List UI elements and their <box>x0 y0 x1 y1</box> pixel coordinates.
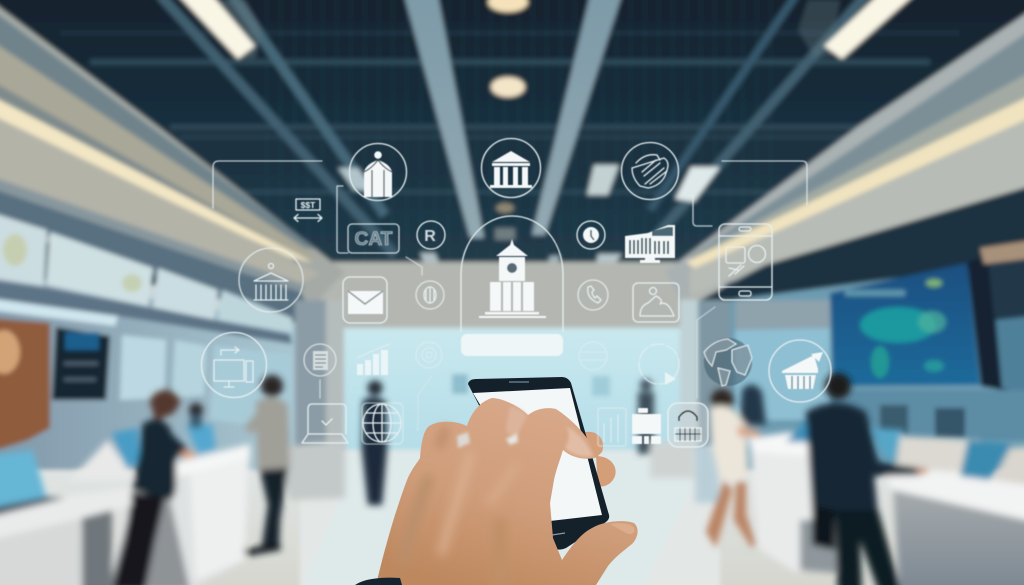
connector: document to laptop <box>319 380 321 398</box>
icon: target <box>416 342 442 368</box>
person: woman in white dress <box>706 389 760 548</box>
person: back right <box>638 379 654 454</box>
light surround panels <box>215 0 262 58</box>
person: man in dark suit <box>806 373 928 585</box>
connector: centre faint <box>416 376 432 430</box>
blue strip <box>0 298 118 326</box>
right upper dark band <box>700 185 1024 320</box>
back wall <box>300 262 720 334</box>
connector: CAT bracket <box>337 186 348 253</box>
person: behind desk right <box>740 384 766 425</box>
wall lamp glow <box>0 330 20 374</box>
desk: back left <box>278 440 345 500</box>
icon: dome circle <box>350 144 406 200</box>
connector: short elbow <box>406 257 422 275</box>
desk: far right <box>880 468 1024 585</box>
desk: bottom left <box>0 488 132 585</box>
icon: $$T exchange <box>294 199 322 222</box>
icon: R circle <box>417 221 445 249</box>
connector: right vertical <box>697 307 715 398</box>
dark wall panel <box>52 327 110 400</box>
icon: telephone circle <box>578 280 608 310</box>
screen frame <box>967 256 1002 390</box>
icon: gauge circle <box>622 142 678 200</box>
laptop screen left desk <box>112 428 140 468</box>
icon: mail <box>343 277 387 323</box>
ceiling slat texture <box>260 0 780 270</box>
icon: rising basket circle <box>769 340 831 402</box>
icon: briefcase <box>632 408 661 444</box>
smartphone <box>468 377 609 550</box>
left soffit <box>0 0 345 320</box>
icon: R circle: R <box>424 228 436 245</box>
person: woman in dark jacket <box>112 390 196 585</box>
desk: centre left <box>105 444 250 585</box>
band below screen <box>830 390 1024 440</box>
laptop right <box>960 440 1012 480</box>
left wall signage panels <box>0 212 292 332</box>
column right <box>680 300 732 470</box>
desk: white ramp left <box>70 440 135 480</box>
connector: top left bracket <box>213 161 322 208</box>
left wall <box>0 270 300 480</box>
far right screens <box>988 250 1024 400</box>
desk: right <box>748 420 860 575</box>
icon: globe tile <box>362 403 403 444</box>
icon: world map globe <box>704 338 752 386</box>
finger tip shading <box>506 406 593 457</box>
icon: laptop <box>302 404 348 443</box>
icon: CAT tag: CAT <box>354 229 393 250</box>
knuckle and tendon shading <box>404 430 516 582</box>
icon: small leaf circle <box>416 281 444 309</box>
column left <box>295 300 343 450</box>
floor <box>0 470 1024 585</box>
icon: classical bank circle <box>239 248 303 312</box>
icon: phone outline <box>719 224 772 300</box>
brown wall panel <box>0 318 50 452</box>
hand holding phone <box>355 398 638 585</box>
icon: bar growth <box>357 344 390 375</box>
laptop bottom left <box>0 450 66 517</box>
person: man in grey shirt <box>243 375 290 556</box>
icon: headset keypad <box>668 403 708 447</box>
icon: bank circle <box>482 138 540 198</box>
ceiling lights <box>178 0 914 274</box>
icon: faint globe <box>639 344 679 385</box>
white device far right <box>994 446 1024 486</box>
dark wall band <box>0 280 292 344</box>
people and desks <box>0 373 1024 585</box>
desk: far right back <box>895 436 980 478</box>
icon: clock <box>577 221 605 249</box>
right wall <box>730 260 1024 470</box>
icon: document circle <box>304 344 336 376</box>
laptop screen centre desk <box>186 424 216 454</box>
hand: far fingers behind phone <box>585 432 616 487</box>
thumb nail edge <box>610 523 635 534</box>
interface overlay icons <box>202 138 831 447</box>
icon: bars tile <box>598 408 626 446</box>
person: centre back <box>362 380 387 505</box>
ceiling grid beams <box>60 0 960 255</box>
icon: monitor chart <box>625 225 675 263</box>
sleeve <box>355 578 402 585</box>
icon: computer circle <box>202 332 266 398</box>
small person behind desk <box>189 403 203 428</box>
connector: top right bracket <box>693 161 807 226</box>
world map screen <box>830 263 980 386</box>
right soffit <box>665 8 1024 300</box>
gaps between fingers showing phone screen <box>457 432 518 448</box>
icon: faint card circle <box>579 342 607 370</box>
laptop centre right <box>872 428 905 462</box>
icon: $$T exchange: $$T <box>301 200 316 210</box>
desk: back right <box>650 442 719 503</box>
central ceiling beams <box>404 0 484 238</box>
ceiling <box>0 0 1024 285</box>
icon: CAT tag <box>348 224 399 253</box>
icon: central dome bank <box>461 216 563 356</box>
icon: hands card <box>633 283 679 322</box>
back window <box>344 328 680 453</box>
